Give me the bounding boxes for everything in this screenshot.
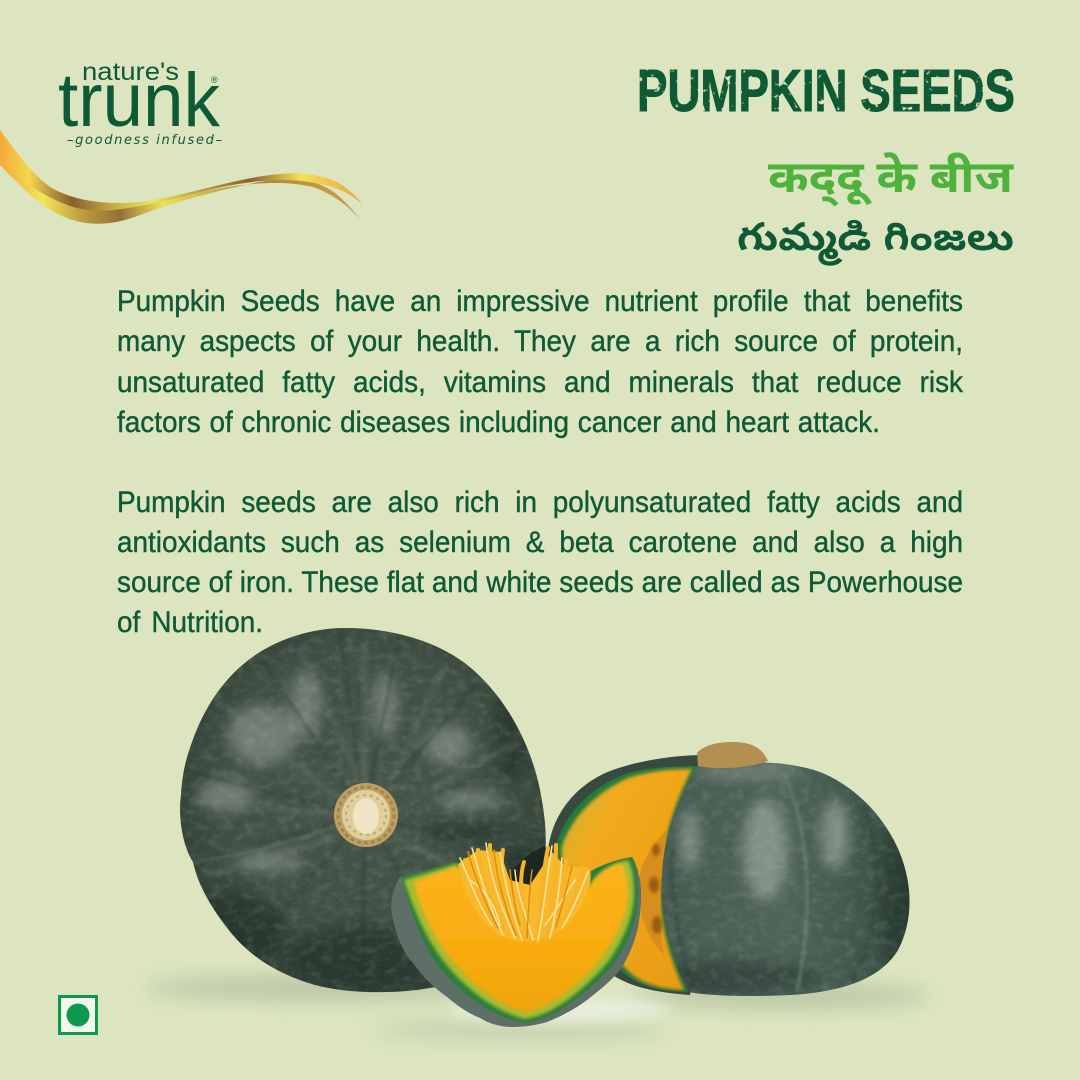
vegetarian mark [60, 996, 96, 1034]
text: Pumpkin seeds are also rich in polyunsaturated fatty acids and [117, 486, 963, 519]
hindi heading: कद्‌दू के बीज [768, 151, 1015, 210]
text: unsaturated fatty acids, vitamins and minerals that reduce risk [117, 366, 963, 399]
illustration: pumpkin wedge [391, 843, 641, 1027]
logo word: trunk: trunk [58, 58, 221, 143]
radial streaks [193, 643, 518, 876]
body text: paragraph one [117, 285, 964, 439]
wedge green line [401, 857, 638, 1023]
back rind and cut flesh [548, 755, 720, 995]
text: source of iron. These flat and white seeds are called as Powerhouse [117, 566, 963, 599]
text: of Nutrition. [117, 606, 263, 639]
dark shadow behind wedge [510, 846, 548, 890]
text: antioxidants such as selenium & beta carotene and also a high [117, 526, 963, 559]
text: many aspects of your health. They are a rich source of protein, [117, 325, 963, 358]
illustration: right pumpkin [548, 742, 915, 1000]
body text: paragraph two [117, 486, 963, 639]
wedge rind [391, 857, 641, 1027]
gold ribbon swoosh [0, 130, 362, 224]
registered mark: ® [211, 75, 218, 85]
outer skin [662, 762, 910, 996]
telugu heading: గుమ్మడి గింజలు [737, 216, 1014, 269]
illustration: left pumpkin [175, 625, 555, 995]
soft light patches [198, 671, 502, 871]
ground shadows [145, 977, 930, 1036]
wedge fibres [458, 843, 591, 942]
logo tagline: –goodness infused– [67, 133, 222, 148]
pale floor glow [450, 998, 670, 1022]
logo [58, 58, 222, 148]
text: factors of chronic diseases including cancer and heart attack. [117, 406, 880, 439]
seed cavity [638, 828, 668, 955]
right pumpkin stem [697, 742, 768, 768]
logo word: nature's: nature's [82, 58, 179, 86]
wedge flesh [404, 860, 634, 1019]
left pumpkin blossom end [334, 783, 398, 847]
text: Pumpkin Seeds have an impressive nutrient profile that benefits [117, 285, 963, 318]
